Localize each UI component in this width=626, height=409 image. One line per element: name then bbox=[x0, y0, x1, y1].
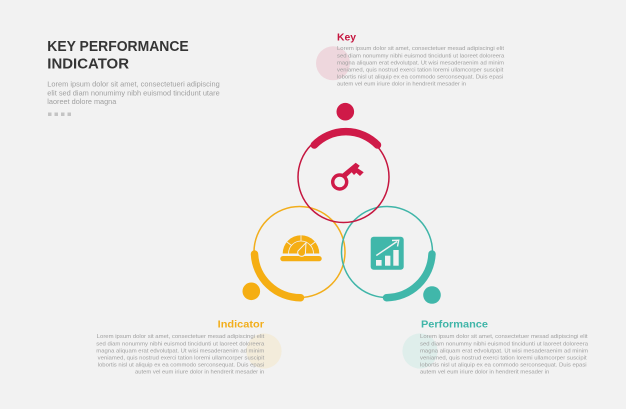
icon: gauge helmet bbox=[280, 235, 322, 261]
icon: growth chart bbox=[371, 237, 404, 270]
key body text: veniamed, quis nostrud exerci tation loremi ullamcorper suscipit bbox=[337, 67, 504, 73]
performance body text: magna aliquam erat edvolutpat. Ut wisi mesaderaenim ad minim bbox=[420, 348, 588, 354]
key body text: Lorem ipsum dolor sit amet, consectetuer mesad adipiscingi elit bbox=[337, 46, 504, 52]
intro text block: elit sed diam nonumimy nibh euismod tincidunt utare bbox=[47, 88, 220, 97]
icon: key bbox=[333, 163, 364, 189]
key body text: magna aliquam erat edvolutpat. Ut wisi mesaderaenim ad minim bbox=[337, 60, 504, 66]
intro text block: Lorem ipsum dolor sit amet, consectetueri adipiscing bbox=[47, 80, 220, 89]
performance pale circle bbox=[402, 333, 438, 369]
indicator body text: sed diam nonummy nibhi euismod tincidunti ut laoreet doloreera bbox=[96, 341, 265, 347]
panel: key text bbox=[316, 32, 505, 88]
title: INDICATOR bbox=[47, 57, 130, 73]
indicator body text bbox=[96, 334, 265, 376]
performance body text: lobortis nisl ut aliquip ex ea commodo serconsequat. Duis epasi bbox=[420, 362, 587, 368]
performance body text: veniamed, quis nostrud exerci tation loremi ullamcorper suscipit bbox=[420, 355, 587, 361]
panel: indicator text bbox=[96, 318, 282, 376]
yellow circle: indicator bbox=[242, 206, 345, 300]
title bbox=[47, 39, 189, 73]
indicator heading: Indicator bbox=[218, 318, 264, 330]
performance body text: autem vel eum iriure dolor in hendrerit mesader in bbox=[420, 370, 549, 376]
intro text block: laoreet dolore magna bbox=[47, 97, 117, 106]
pagination dots bbox=[48, 112, 71, 116]
key heading: Key bbox=[337, 32, 356, 44]
red thick arc bbox=[314, 132, 378, 145]
red dot bbox=[336, 103, 354, 120]
intro text block bbox=[47, 80, 220, 106]
performance body text: Lorem ipsum dolor sit amet, consectetuer mesad adipiscingi elit bbox=[420, 334, 588, 340]
red circle: key bbox=[298, 103, 389, 222]
indicator body text: Lorem ipsum dolor sit amet, consectetuer mesad adipiscingi elit bbox=[97, 334, 265, 340]
key pale circle bbox=[316, 46, 350, 80]
panel: performance text bbox=[402, 318, 589, 376]
indicator pale circle bbox=[246, 333, 282, 369]
indicator body text: magna aliquam erat edvolutpat. Ut wisi mesaderaenim ad minim bbox=[96, 348, 265, 354]
title: KEY PERFORMANCE bbox=[47, 39, 189, 55]
teal thick arc bbox=[386, 254, 432, 298]
key body text: lobortis nisl ut aliquip ex ea commodo serconsequat. Duis epasi bbox=[337, 74, 503, 80]
yellow thick arc bbox=[254, 254, 300, 298]
key body text bbox=[337, 46, 505, 88]
yellow dot bbox=[242, 282, 260, 300]
indicator body text: veniamed, quis nostrud exerci tation loremi ullamcorper suscipit bbox=[98, 355, 265, 361]
gauge needle bbox=[298, 243, 306, 256]
performance body text: sed diam nonummy nibhi euismod tincidunti ut laoreet doloreera bbox=[420, 341, 589, 347]
performance heading: Performance bbox=[421, 318, 488, 330]
key body text: autem vel eum iriure dolor in hendrerit mesader in bbox=[337, 82, 466, 88]
indicator body text: lobortis nisl ut aliquip ex ea commodo serconsequat. Duis epasi bbox=[98, 362, 264, 368]
performance body text bbox=[420, 334, 589, 376]
teal dot bbox=[423, 286, 441, 304]
key body text: sed diam nonummy nibhi euismod tincidunti ut laoreet doloreera bbox=[337, 53, 505, 59]
teal circle: performance bbox=[342, 206, 441, 304]
indicator body text: autem vel eum iriure dolor in hendrerit mesader in bbox=[135, 370, 264, 376]
